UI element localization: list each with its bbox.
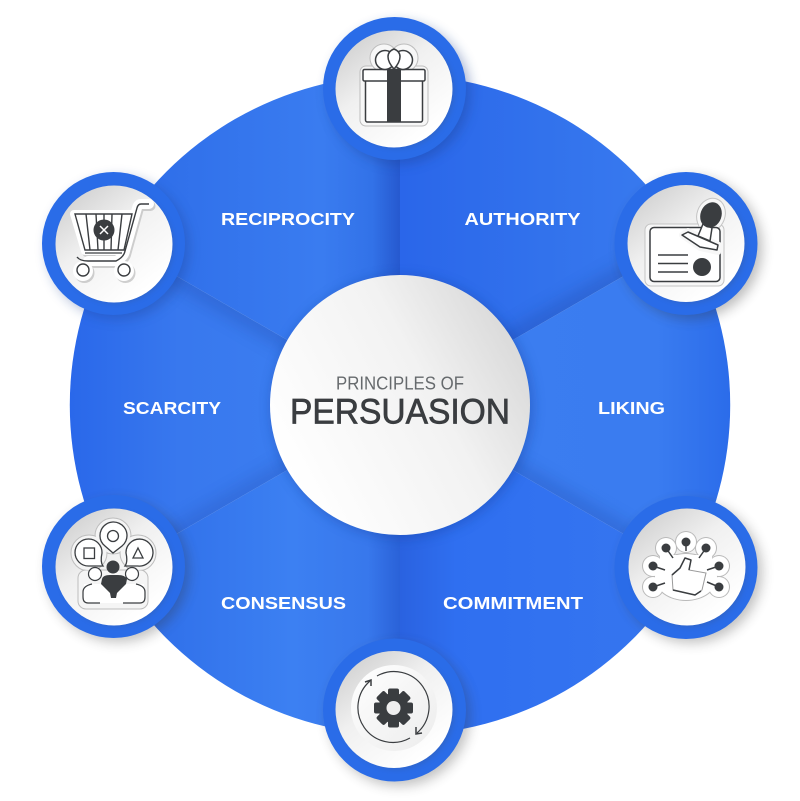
icon: shopping cart: [73, 204, 150, 283]
blue wheel: [70, 75, 730, 735]
label: commitment: COMMITMENT: [443, 593, 583, 613]
center circle shadow: [271, 276, 533, 538]
node: gift (top): [323, 17, 470, 164]
label: consensus: CONSENSUS: [221, 593, 346, 613]
label: scarcity: SCARCITY: [123, 398, 221, 418]
icon: gear with cycle arrows: [358, 672, 429, 742]
node: gear (bottom): [323, 638, 470, 786]
segment: commitment: [400, 405, 686, 735]
label: liking: LIKING: [598, 398, 665, 418]
center title: [290, 372, 510, 432]
icon: stamp and card: [645, 194, 730, 286]
node: shopping cart (upper left): [42, 172, 189, 319]
segment labels: [123, 209, 665, 613]
segment: reciprocity: [114, 75, 400, 405]
node: stamp (upper right): [614, 172, 762, 319]
label: authority: AUTHORITY: [464, 209, 581, 229]
segment: authority: [400, 75, 686, 405]
center circle: [270, 275, 530, 535]
center title: PERSUASION: [290, 392, 510, 432]
segment: consensus: [114, 405, 400, 735]
label: reciprocity: RECIPROCITY: [221, 209, 355, 229]
segment: liking: [400, 240, 730, 570]
segment: scarcity: [70, 240, 400, 570]
node: consensus people (lower left): [42, 495, 189, 642]
icon: gift box: [360, 44, 428, 126]
icon: thumbs up with nodes: [642, 531, 730, 601]
center title: PRINCIPLES OF: [336, 372, 464, 394]
icon: people with speech bubbles: [71, 518, 156, 609]
node: thumbs up (lower right): [614, 496, 762, 643]
